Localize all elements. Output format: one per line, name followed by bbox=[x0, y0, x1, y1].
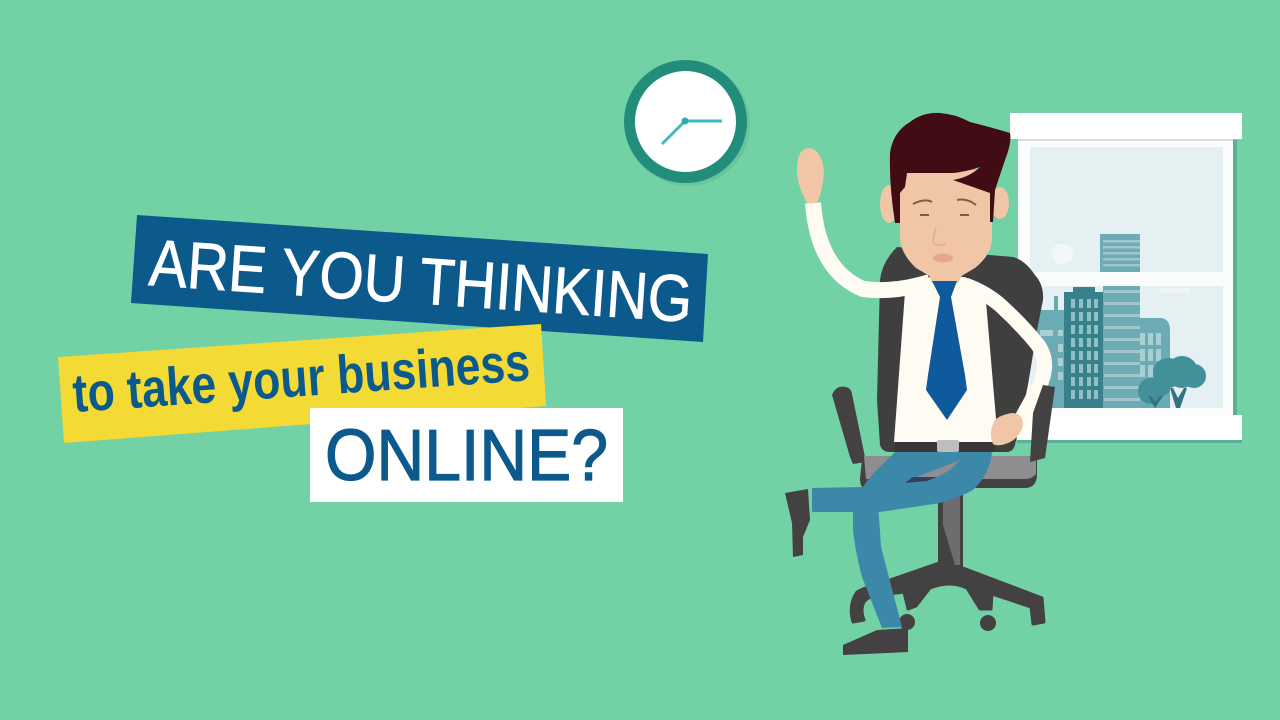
businessman bbox=[785, 113, 1055, 655]
shirt bbox=[894, 277, 998, 442]
nose bbox=[933, 228, 946, 245]
right armrest bbox=[1030, 385, 1055, 462]
right hand bbox=[991, 413, 1023, 445]
belt bbox=[895, 442, 995, 452]
cloud bbox=[1042, 244, 1190, 293]
lower leg bbox=[853, 505, 902, 628]
chair back bbox=[877, 247, 1043, 452]
trousers bbox=[812, 452, 992, 512]
closed eyes bbox=[920, 214, 969, 216]
window sill bbox=[1017, 415, 1242, 440]
trees bbox=[1138, 356, 1206, 408]
icon: wall clock bbox=[624, 60, 750, 186]
chair column bbox=[938, 490, 963, 568]
raised arm bbox=[813, 203, 930, 290]
window glass bbox=[1030, 147, 1223, 408]
ears bbox=[880, 185, 898, 223]
window blind top bar bbox=[1010, 113, 1242, 139]
subheading banner: to take your business: to take your business bbox=[71, 332, 532, 424]
heading banner: are you thinking: ARE YOU THINKING bbox=[147, 225, 695, 336]
chair seat bbox=[860, 460, 1037, 488]
city buildings bbox=[1037, 234, 1170, 408]
heading banner: online: ONLINE? bbox=[325, 416, 608, 496]
office chair bbox=[832, 247, 1044, 631]
eyebrows bbox=[913, 200, 976, 205]
tie bbox=[926, 281, 967, 420]
mouth bbox=[933, 254, 953, 262]
lower shoe bbox=[843, 628, 908, 655]
hair bbox=[890, 113, 1010, 223]
neck bbox=[927, 270, 965, 283]
face bbox=[900, 170, 992, 278]
raised hand bbox=[797, 148, 824, 203]
chair base bbox=[851, 563, 1044, 624]
window with city view bbox=[1010, 113, 1242, 443]
raised shoe bbox=[785, 489, 810, 557]
right arm bbox=[965, 285, 1045, 425]
left armrest bbox=[832, 387, 866, 464]
window middle bar bbox=[1030, 272, 1223, 286]
